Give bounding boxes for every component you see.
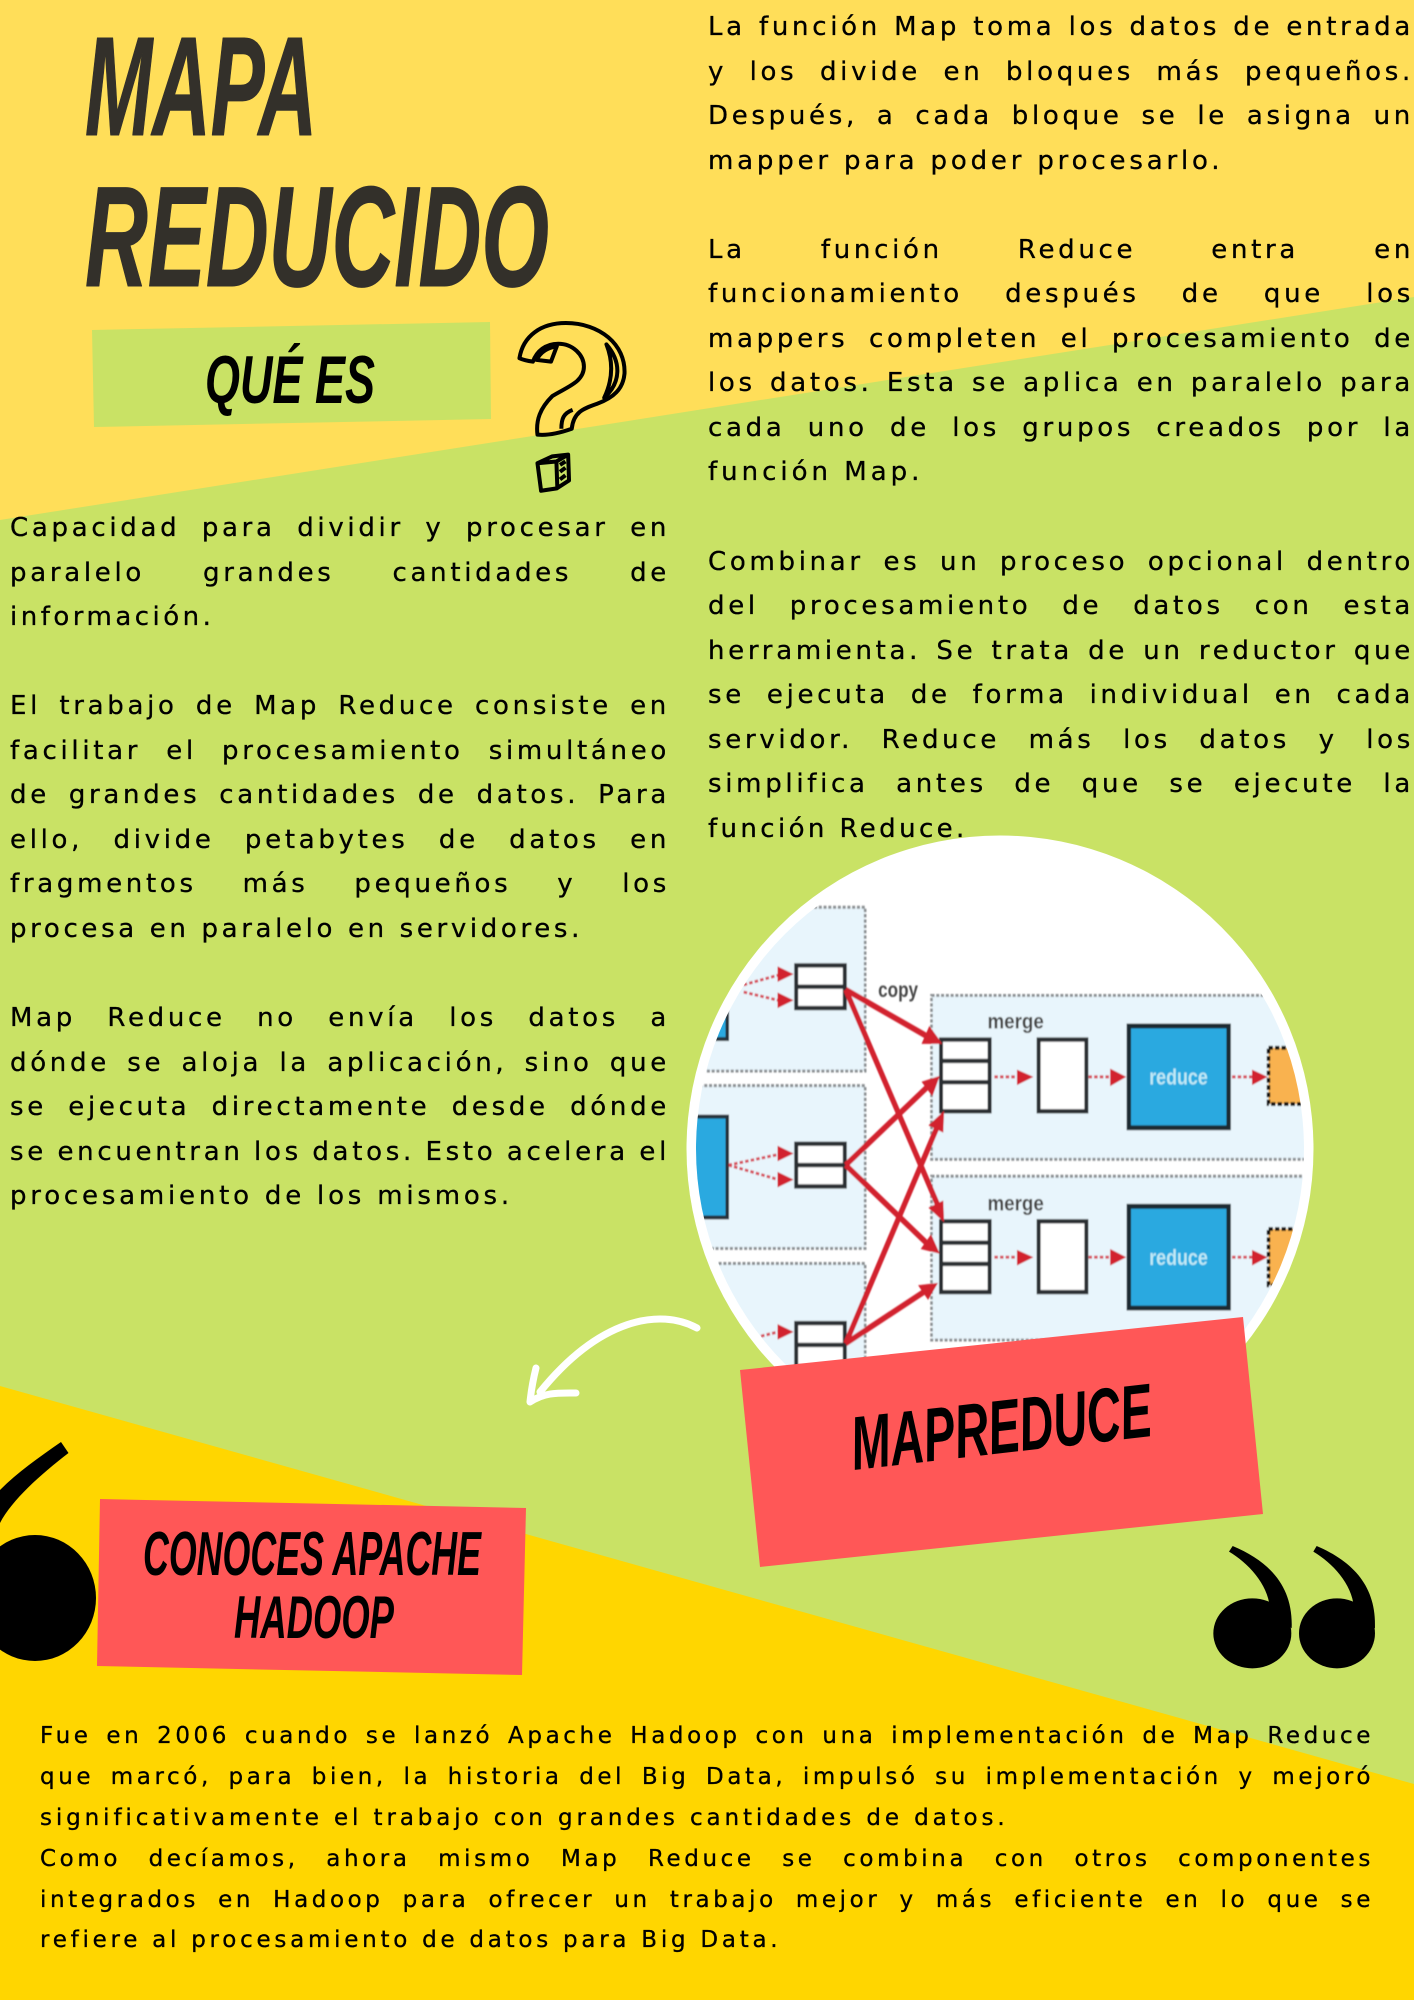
text block: right column 3: simplifica antes de que se ejecute la (708, 769, 1414, 799)
banner: MapReduce: MAPREDUCE (846, 1368, 1157, 1487)
text block: right column 3: del procesamiento de datos con esta (708, 591, 1414, 621)
icon: opening quote (0, 1442, 96, 1661)
title: Mapa Reducido: REDUCIDO (85, 158, 549, 317)
text block: right column 3: se ejecuta de forma individual en cada (708, 680, 1414, 710)
text block: left column 1 (10, 513, 670, 632)
banner: MapReduce (740, 1317, 1263, 1567)
icon: closing quote (1213, 1546, 1375, 1668)
text block: right column 2: La función Reduce entra en (708, 235, 1414, 265)
text block: right column 1: Después, a cada bloque se le asigna un (708, 101, 1414, 131)
text block: bottom paragraph: Fue en 2006 cuando se lanzó Apache Hadoop con una implementación de Map Reduce (40, 1723, 1374, 1749)
diagram labels: merge (987, 1193, 1044, 1216)
text block: right column 3: herramienta. Se trata de un reductor que (708, 636, 1414, 666)
panels (698, 904, 1304, 1365)
text block: left column 1: paralelo grandes cantidades de (10, 558, 670, 588)
text block: right column 2: funcionamiento después de que los (708, 279, 1414, 309)
text block: left column 2: El trabajo de Map Reduce consiste en (10, 691, 670, 721)
heading banner: Conoces Apache Hadoop: CONOCES APACHE (143, 1520, 482, 1589)
text block: left column 3: Map Reduce no envía los datos a (10, 1003, 670, 1033)
text block: left column 2: ello, divide petabytes de datos en (10, 825, 670, 855)
diagram labels: copy (878, 979, 919, 1002)
output boxes (1266, 1044, 1301, 1288)
text block: right column 1 (708, 12, 1414, 176)
image: MapReduce diagram: reduce (1149, 1066, 1208, 1090)
title: Mapa Reducido: MAPA (85, 7, 317, 165)
text block: right column 3: función Reduce. (708, 814, 968, 844)
heading banner: Conoces Apache Hadoop: HADOOP (234, 1584, 395, 1651)
text block: bottom paragraph: Como decíamos, ahora mismo Map Reduce se combina con otros componentes (40, 1846, 1374, 1872)
reduce boxes (1129, 1026, 1229, 1308)
text block: left column 3: se encuentran los datos. Esto acelera el (10, 1137, 670, 1167)
heading banner: Conoces Apache Hadoop (97, 1499, 526, 1675)
heading banner: Qué es (92, 322, 491, 427)
text block: left column 3: procesamiento de los mismos. (10, 1181, 513, 1211)
text block: right column 2: función Map. (708, 457, 923, 487)
background: gold bottom (0, 1386, 1414, 2000)
map blue boxes (696, 1010, 730, 1220)
text block: bottom paragraph: refiere al procesamiento de datos para Big Data. (40, 1927, 781, 1953)
text block: left column 1: Capacidad para dividir y procesar en (10, 513, 670, 543)
text block: left column 2: fragmentos más pequeños y los (10, 869, 670, 899)
heading banner: Qué es: QUÉ ES (205, 342, 375, 418)
title: Mapa Reducido (85, 7, 549, 317)
text block: left column 3: se ejecuta directamente desde dónde (10, 1092, 670, 1122)
spill boxes (796, 965, 1086, 1367)
text block: right column 1: mapper para poder procesarlo. (708, 146, 1223, 176)
text block: bottom paragraph: integrados en Hadoop para ofrecer un trabajo mejor y más eficiente en lo que se (40, 1887, 1374, 1913)
text block: right column 2: los datos. Esta se aplica en paralelo para (708, 368, 1414, 398)
text block: right column 3: servidor. Reduce más los datos y los (708, 725, 1414, 755)
text block: bottom paragraph: que marcó, para bien, la historia del Big Data, impulsó su implementación y mejoró (40, 1764, 1374, 1790)
text block: left column 2: procesa en paralelo en servidores. (10, 914, 583, 944)
text block: left column 3 (10, 1003, 670, 1211)
icon: question mark (519, 323, 625, 491)
text block: bottom paragraph: significativamente el trabajo con grandes cantidades de datos. (40, 1805, 1009, 1831)
text block: left column 2: facilitar el procesamiento simultáneo (10, 736, 670, 766)
text block: left column 1: información. (10, 602, 214, 632)
diagram labels: merge (987, 1011, 1044, 1034)
text block: left column 2: de grandes cantidades de datos. Para (10, 780, 670, 810)
arrow (530, 1319, 697, 1402)
image: MapReduce diagram: reduce (1149, 1246, 1208, 1270)
text block: left column 2 (10, 691, 670, 944)
image: MapReduce diagram (686, 836, 1314, 1366)
text block: left column 3: dónde se aloja la aplicación, sino que (10, 1048, 670, 1078)
diagram labels (878, 979, 1044, 1216)
text block: right column 3 (708, 547, 1414, 844)
text block: right column 3: Combinar es un proceso opcional dentro (708, 547, 1414, 577)
background: green band (0, 297, 1414, 1800)
text block: bottom paragraph (40, 1723, 1374, 1953)
text block: right column 2: mappers completen el procesamiento de (708, 324, 1414, 354)
text block: right column 2 (708, 235, 1414, 487)
text block: right column 2: cada uno de los grupos creados por la (708, 413, 1414, 443)
copy arrows (846, 990, 939, 1343)
text block: right column 1: y los divide en bloques más pequeños. (708, 57, 1414, 87)
text block: right column 1: La función Map toma los datos de entrada (708, 12, 1414, 42)
